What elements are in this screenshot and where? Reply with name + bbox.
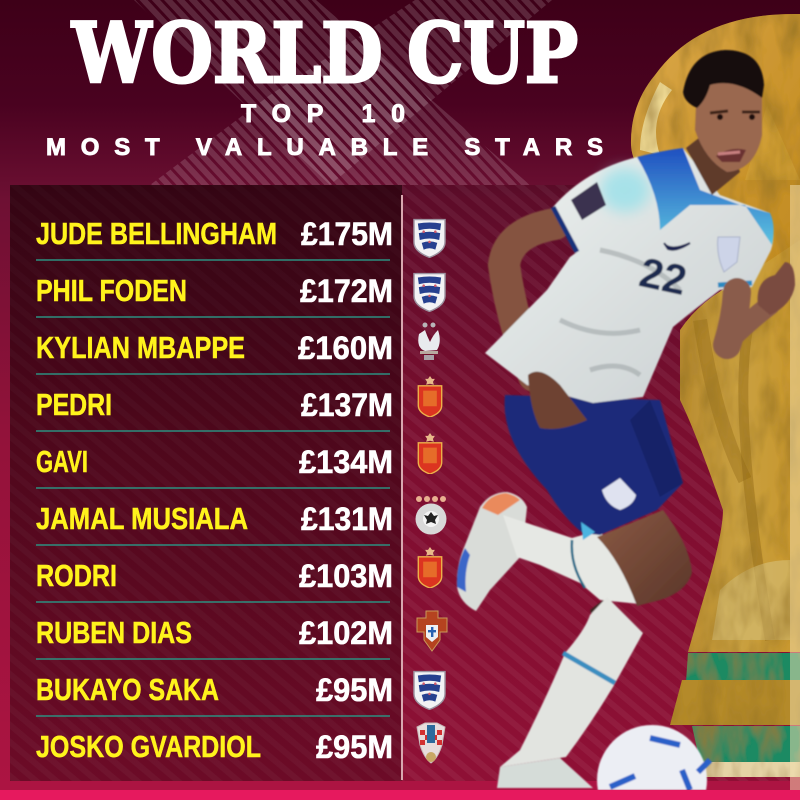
row 1: Jude Bellingham [36,216,445,257]
hair [683,50,764,108]
row 8: Ruben Dias: £102M [299,615,393,651]
row 7: Rodri: RODRI [36,558,117,593]
data panel [10,185,790,781]
trophy upper green band [686,653,800,682]
row 4: Pedri: PEDRI [36,387,112,422]
raised leg sock [503,515,640,604]
hand on shorts [528,372,587,429]
subtitle line one: TOP 10 [241,100,405,128]
shirt folds [560,250,680,375]
row 5: Gavi: £134M [299,444,393,480]
shorts badge [602,478,636,510]
standing leg sock [500,597,643,767]
trophy globe [631,14,800,300]
row 2: Phil Foden [36,273,445,311]
row 5: Gavi: GAVI [36,444,88,479]
nike swoosh [664,243,690,250]
row 1: Jude Bellingham: JUDE BELLINGHAM [36,216,277,251]
right hand [758,262,795,315]
row 6: Jamal Musiala [36,496,446,537]
row 4: Pedri [36,376,442,423]
left arm [504,224,555,376]
row 4: Pedri: £137M [301,387,393,423]
row 2: Phil Foden: PHIL FODEN [36,273,187,308]
row 8: Ruben Dias [36,611,447,651]
row 3: Kylian Mbappe: KYLIAN MBAPPE [36,330,245,365]
column divider [401,195,403,780]
trophy [631,14,800,777]
icon: Germany crest [416,496,446,534]
trophy gold base [670,680,800,725]
cyan shoulder glow [600,168,650,212]
thigh [597,510,692,606]
row separators [36,260,390,716]
bottom bar [0,790,800,800]
row 7: Rodri [36,547,442,594]
row 9: Bukayo Saka: £95M [316,672,393,708]
chest badge [718,237,740,272]
row 3: Kylian Mbappe: £160M [298,330,393,366]
row 10: Josko Gvardiol [36,723,445,765]
trophy cream base stripe [705,762,800,777]
player: Jude Bellingham [457,50,795,800]
row 8: Ruben Dias: RUBEN DIAS [36,615,192,650]
face [695,81,762,172]
row 5: Gavi [36,433,442,480]
title: WORLD CUP [71,6,578,102]
row 3: Kylian Mbappe [36,322,440,366]
shirt [485,148,773,403]
row 1: Jude Bellingham: £175M [301,216,393,252]
sleeve patch [571,182,606,220]
shirt collar and shoulder colour [637,148,774,245]
panel left column [10,185,402,781]
back lower leg [590,597,643,680]
standing boot [497,758,593,788]
subtitle line two: MOST VALUABLE STARS [46,134,603,161]
row 9: Bukayo Saka [36,672,445,709]
ball [597,725,710,800]
icon: Portugal crest [417,611,447,651]
trophy lower green band [692,726,800,762]
shorts [505,395,683,535]
row 7: Rodri: £103M [299,558,393,594]
icon: France rooster crest [418,322,440,360]
row 9: Bukayo Saka: BUKAYO SAKA [36,672,219,707]
icon: Croatia crest [417,723,445,763]
row 6: Jamal Musiala: JAMAL MUSIALA [36,501,248,536]
panel tint [10,185,790,781]
right margin highlight [790,185,800,790]
right arm [727,292,737,345]
row 2: Phil Foden: £172M [300,273,393,309]
neck [686,120,740,195]
shirt number: 22 [635,248,691,304]
trophy body [680,240,800,652]
row 10: Josko Gvardiol: JOSKO GVARDIOL [36,729,261,764]
background hatched X pattern [134,0,552,185]
raised boot [457,492,527,611]
row 10: Josko Gvardiol: £95M [316,729,393,765]
row 6: Jamal Musiala: £131M [301,501,393,537]
